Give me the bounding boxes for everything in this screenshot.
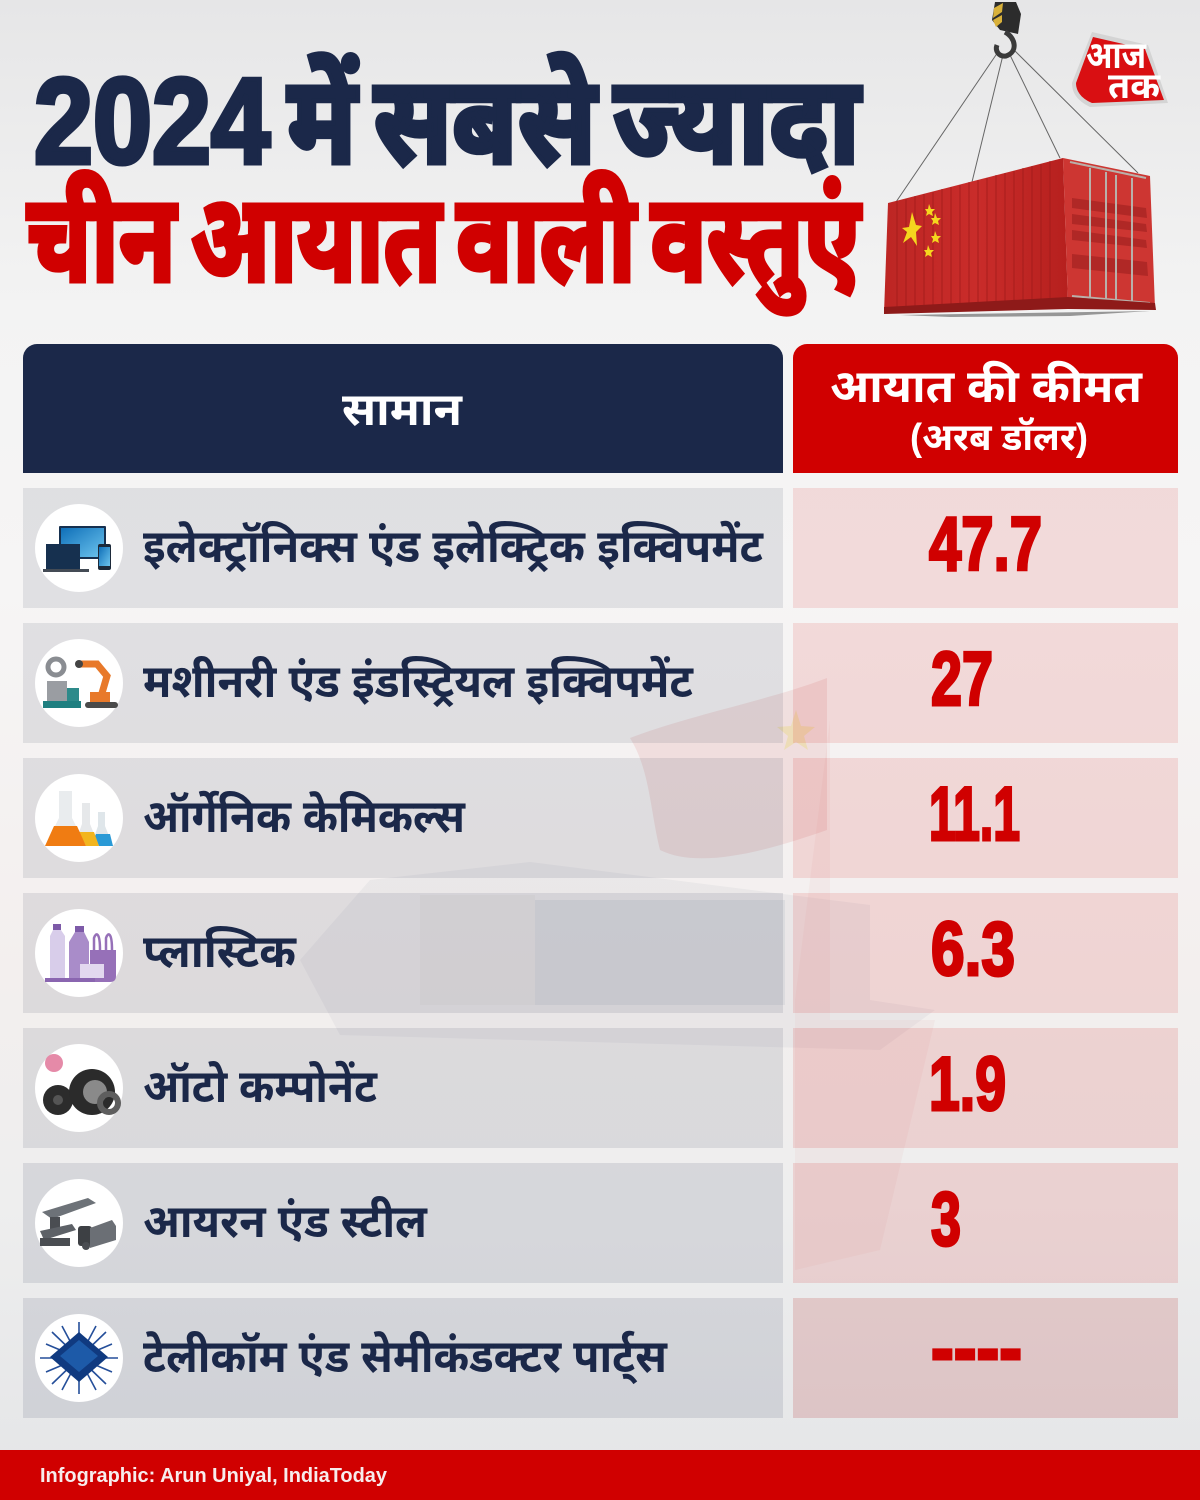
flag stars on container (902, 204, 941, 257)
table header: goods: सामान (342, 383, 463, 435)
container side (884, 158, 1068, 313)
background photo: flag and cargo ship (300, 678, 935, 1270)
icon: robot arm and gears (43, 659, 118, 708)
crane hook (992, 2, 1021, 56)
illustration: container hanging from crane hook (884, 2, 1156, 317)
container base (884, 297, 1156, 314)
row 1: electronics (23, 488, 1178, 608)
row 2: machinery: 27 (931, 637, 993, 722)
row 3: organic chemicals (23, 758, 1178, 878)
icon: flasks (45, 791, 113, 846)
ropes (896, 50, 1138, 202)
row 2: machinery: मशीनरी एंड इंडस्ट्रियल इक्विपमेंट (143, 655, 694, 708)
row 6: iron and steel (23, 1163, 1178, 1283)
icon: plastic bottles and bag (45, 924, 116, 982)
row 6: iron and steel: आयरन एंड स्टील (143, 1195, 428, 1247)
footer bar (0, 1450, 1200, 1500)
table header: import value: आयात की कीमत (830, 360, 1143, 412)
icon: tyres and gear (43, 1054, 118, 1115)
row 5: auto components: 1.9 (929, 1042, 1006, 1127)
icon: microchip (40, 1322, 118, 1394)
row 4: plastic (23, 893, 1178, 1013)
container door (1063, 158, 1155, 308)
row 7: telecom and semiconductor parts: टेलीकॉम एंड सेमीकंडक्टर पार्ट्स (143, 1329, 668, 1384)
title line 1: 2024 में सबसे ज्यादा (34, 53, 862, 189)
table header: import value: (अरब डॉलर) (910, 416, 1088, 459)
logo: Aaj Tak (1072, 32, 1168, 107)
icon: steel beams (40, 1198, 116, 1250)
row 4: plastic: 6.3 (931, 907, 1015, 992)
value: not available: ---- (931, 1306, 1022, 1391)
title line 2: चीन आयात वाली वस्तुएं (27, 171, 861, 314)
row 4: plastic: प्लास्टिक (143, 925, 297, 977)
title (27, 53, 862, 314)
row 6: iron and steel: 3 (931, 1177, 961, 1262)
icon: devices (43, 526, 111, 572)
logo: Aaj Tak: आज (1086, 35, 1147, 77)
row 3: organic chemicals: ऑर्गेनिक केमिकल्स (143, 789, 466, 842)
footer bar: Infographic: Arun Uniyal, IndiaToday (40, 1465, 388, 1487)
table header: import value (793, 344, 1178, 473)
row 1: electronics: इलेक्ट्रॉनिक्स एंड इलेक्ट्रिक इक्विपमेंट (143, 519, 764, 573)
row 5: auto components (23, 1028, 1178, 1148)
logo: Aaj Tak: तक (1108, 65, 1161, 106)
row 1: electronics: 47.7 (929, 502, 1042, 587)
row 3: organic chemicals: 11.1 (929, 772, 1020, 857)
row 2: machinery (23, 623, 1178, 743)
table header: goods (23, 344, 783, 473)
row 7: telecom and semiconductor parts (23, 1298, 1178, 1418)
row 5: auto components: ऑटो कम्पोनेंट (143, 1060, 378, 1112)
